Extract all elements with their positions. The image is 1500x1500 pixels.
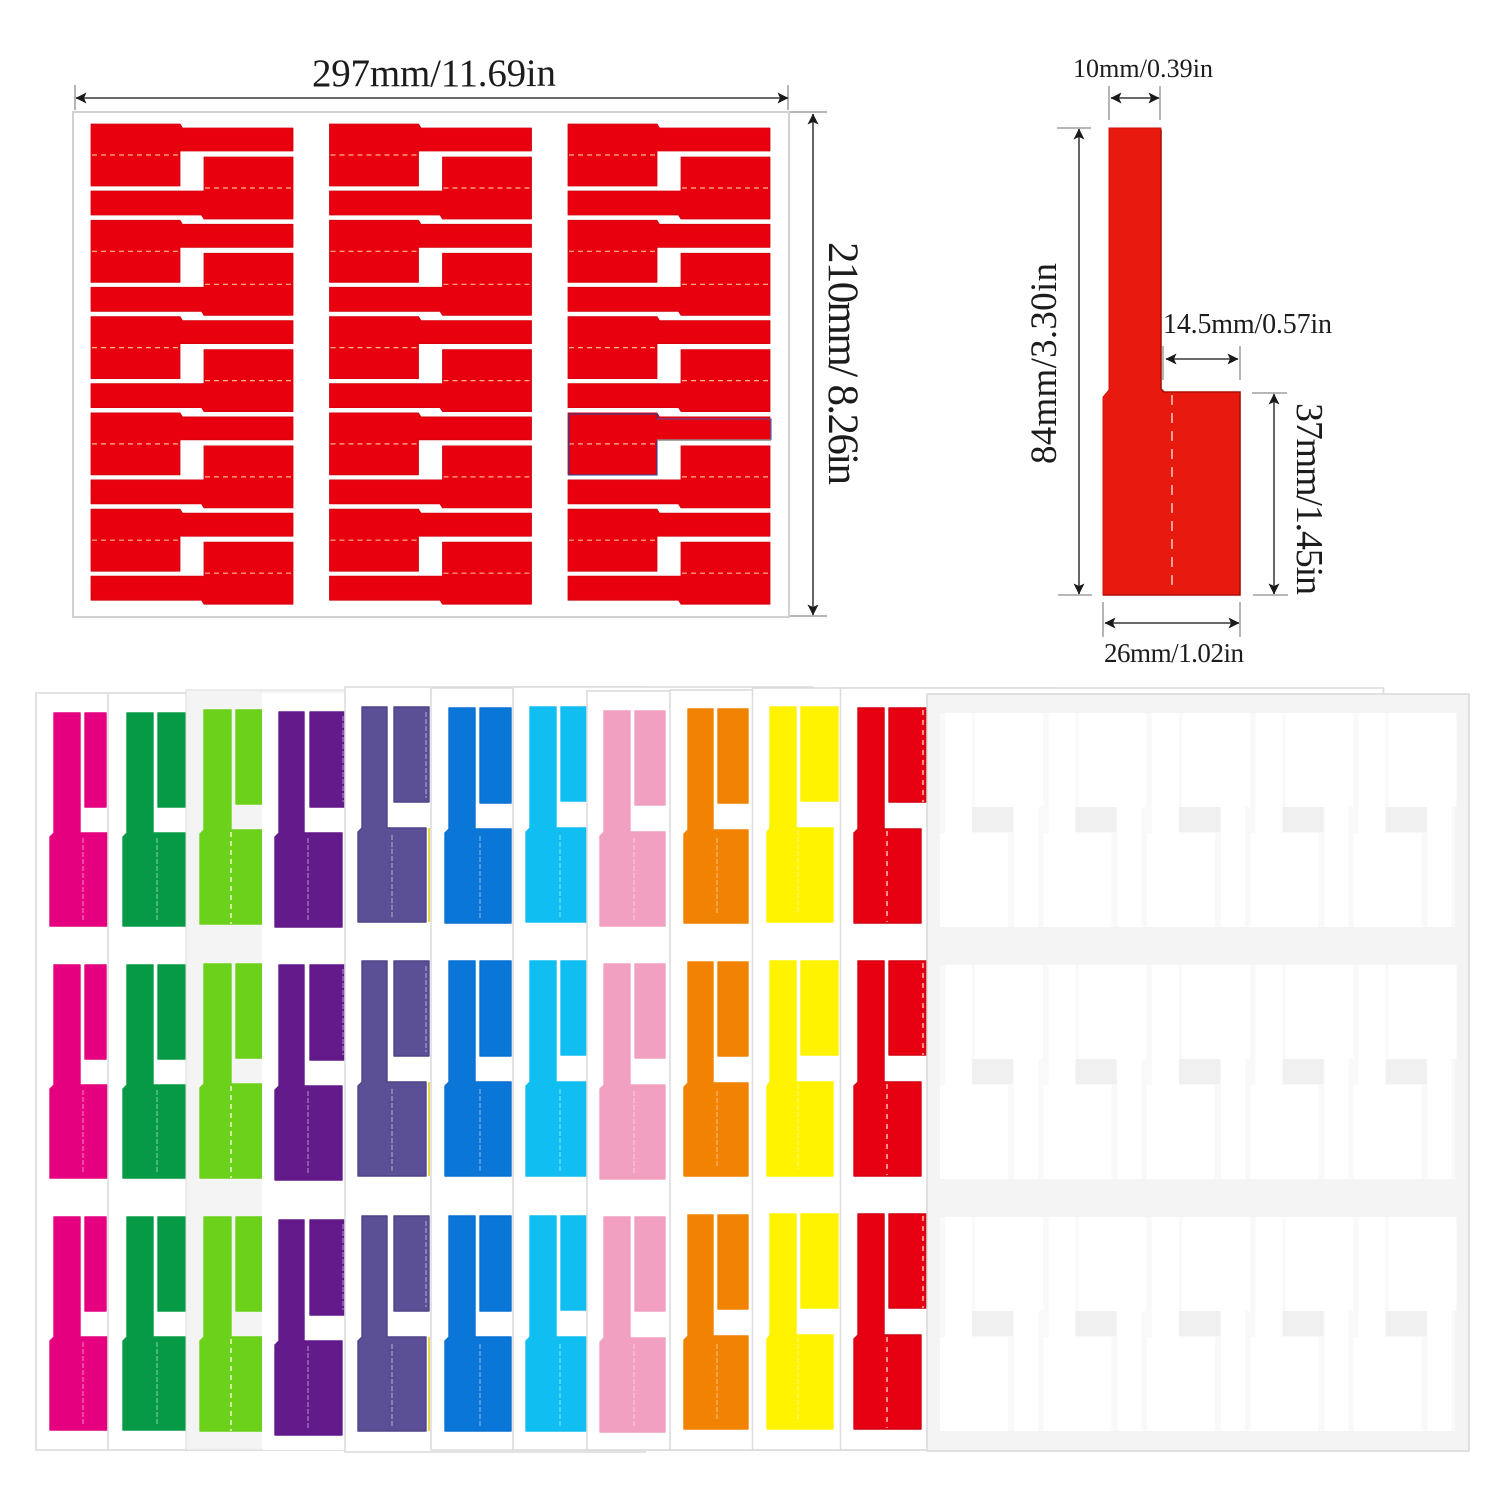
sheet: magenta [36,693,336,1450]
sheet outline [73,112,789,617]
sheet: blue [431,688,731,1450]
dark shaded edge [1103,130,1240,595]
sheet: red [840,688,1384,1450]
dimension: notch width: 14.5mm/0.57in [1163,309,1332,340]
sheet: white labels [927,694,1469,1451]
dimension: sheet width [75,52,788,110]
dimension: tail width [1073,54,1213,120]
dimension: sheet height [790,112,866,616]
sheet: lime [186,690,486,1450]
dimension: sheet width: 297mm/11.69in [312,52,556,95]
sheet: purple [262,693,562,1450]
sheet: pink [587,691,887,1450]
sheet: green [108,693,408,1450]
full-size sheet panel [73,112,789,617]
dimension: body width [1103,602,1244,668]
dimension: tail width: 10mm/0.39in [1073,54,1213,83]
sheet: orange [670,690,970,1450]
dimension: body width: 26mm/1.02in [1104,638,1244,668]
dimension: total length [1024,128,1092,595]
sheet: yellow [752,688,1052,1450]
sheet: cyan [513,687,813,1450]
red label columns [91,124,770,604]
fanned colour sheets [36,687,1469,1452]
dimension: notch width [1163,309,1332,380]
selected label outline [569,414,771,475]
dimension: total length: 84mm/3.30in [1024,263,1065,464]
single label diagram [1103,128,1240,595]
red label shape [1103,128,1240,595]
dimension: sheet height: 210mm/ 8.26in [819,242,866,485]
dimension: body height [1252,393,1330,595]
sheet: slate violet [345,687,645,1452]
perforation line [1171,395,1173,590]
dimension: body height: 37mm/1.45in [1288,403,1330,595]
